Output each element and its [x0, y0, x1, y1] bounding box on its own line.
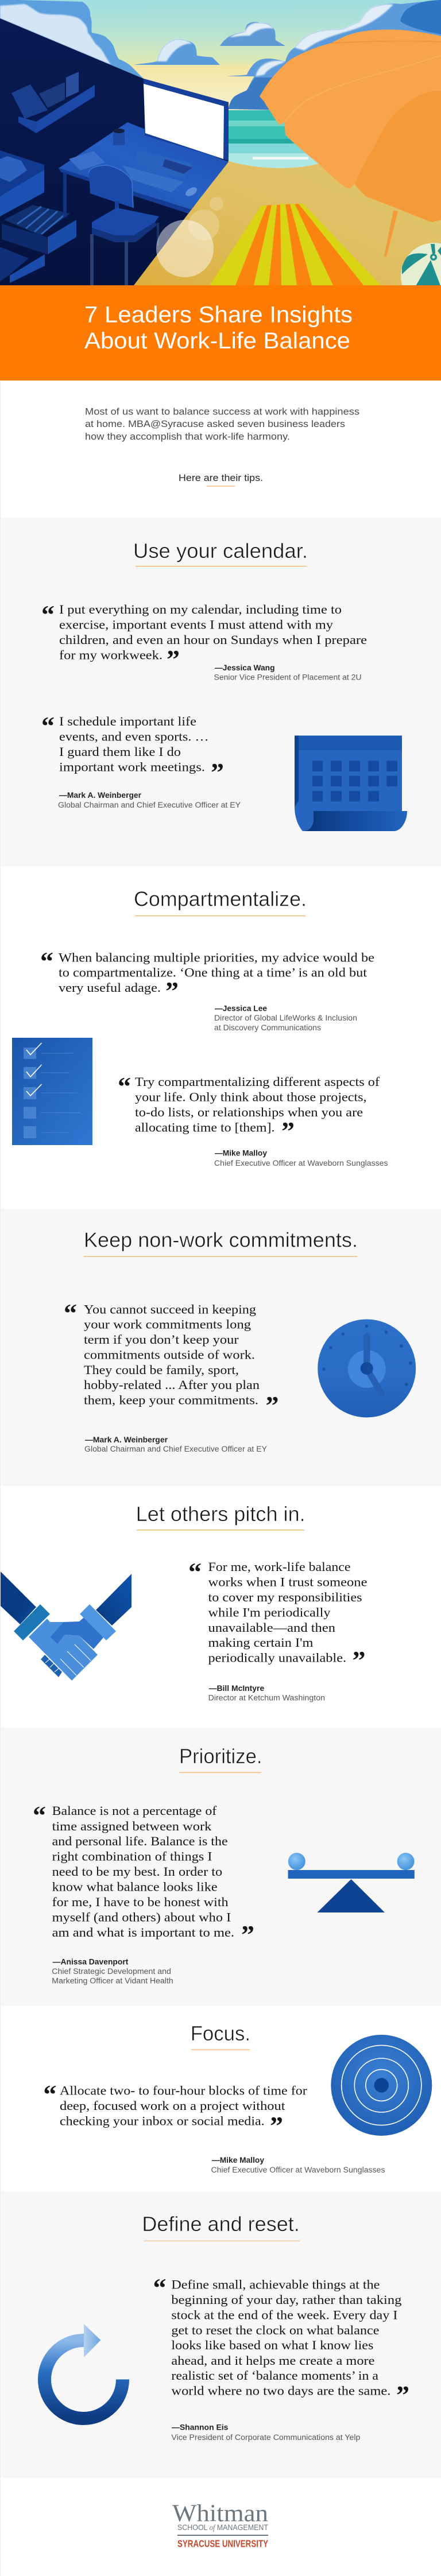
quote: Jessica Wang	[41, 600, 367, 682]
quote: Bill McIntyre: while I'm periodically	[208, 1605, 331, 1619]
heading: prioritize: Prioritize.	[179, 1744, 262, 1768]
quote: Mark A. Weinberger: I guard them like I do	[59, 744, 181, 759]
intro text	[85, 406, 359, 442]
shelf with books	[11, 72, 95, 133]
quote: Shannon Eis: stock at the end of the week. Every day I	[171, 2307, 397, 2322]
quote: Mark A. Weinberger: “	[41, 711, 55, 740]
office wall	[0, 18, 229, 285]
quote: Mike Malloy: Allocate two- to four-hour blocks of time for	[60, 2084, 307, 2097]
quote: Shannon Eis: looks like based on what I know lies	[171, 2338, 373, 2352]
sand	[134, 161, 441, 285]
quote: Anissa Davenport: ”	[241, 1920, 254, 1949]
panel: let others pitch in	[1, 1486, 441, 1728]
quote: Jessica Lee: ”	[165, 976, 179, 1006]
quote: Jessica Lee: —Jessica Lee	[215, 1004, 268, 1012]
quote: Mike Malloy: Try compartmentalizing different aspects of	[135, 1074, 380, 1089]
heading: focus: Focus.	[191, 2022, 250, 2045]
quote: Mark A. Weinberger: events, and even sports. …	[59, 729, 209, 743]
quote: Mark A. Weinberger: I schedule important life	[59, 714, 196, 728]
quote: Mark A. Weinberger: your work commitments long	[84, 1317, 251, 1332]
quote: Shannon Eis: get to reset the clock on what balance	[171, 2323, 379, 2337]
quote: Mike Malloy: ”	[270, 2111, 283, 2140]
quote: Mike Malloy: to-do lists, or relationships when you are	[135, 1105, 363, 1119]
logo: Whitman School of Management, Syracuse University: SYRACUSE UNIVERSITY	[177, 2538, 268, 2550]
quote: Shannon Eis: “	[153, 2273, 167, 2302]
panel: keep non-work commitments	[1, 1209, 441, 1486]
umbrella	[260, 29, 441, 257]
quote: Shannon Eis: —Shannon Eis	[172, 2423, 228, 2431]
quote: Mark A. Weinberger: ”	[211, 758, 224, 787]
quote: Jessica Lee: very useful adage.	[59, 980, 161, 995]
quote: Jessica Wang: children, and even an hour on Sundays when I prepare	[59, 633, 367, 647]
heading: define and reset: Define and reset.	[142, 2212, 300, 2236]
quote: Mark A. Weinberger: They could be family, sport,	[84, 1363, 239, 1377]
quote: Jessica Wang: “	[41, 600, 55, 629]
quote: Mike Malloy: your life. Only think about those projects,	[135, 1090, 367, 1104]
panel: define and reset	[1, 2191, 441, 2478]
intro text: Most of us want to balance success at work with happiness	[85, 406, 359, 417]
quote: Bill McIntyre: For me, work-life balance	[208, 1559, 350, 1574]
quote: Jessica Lee: at Discovery Communications	[214, 1023, 321, 1032]
quote: Bill McIntyre: unavailable—and then	[208, 1620, 335, 1635]
heading: use your calendar: Use your calendar.	[133, 539, 308, 562]
logo: Whitman School of Management, Syracuse University	[172, 2501, 268, 2550]
icon: handshake	[1, 1572, 131, 1681]
quote: Anissa Davenport: need to be my best. In order to	[52, 1864, 222, 1879]
quote: Mike Malloy	[118, 1072, 388, 1167]
quote: Shannon Eis: ”	[396, 2380, 409, 2410]
quote: Anissa Davenport: —Anissa Davenport	[53, 1957, 129, 1966]
quote: Bill McIntyre: works when I trust someone	[208, 1575, 368, 1589]
quote: Mike Malloy: “	[118, 1072, 131, 1101]
quote: Jessica Lee: When balancing multiple priorities, my advice would be	[59, 950, 374, 964]
quote: Shannon Eis: beginning of your day, rather than taking	[171, 2292, 401, 2307]
icon: balance scale	[288, 1853, 415, 1912]
quote: Mark A. Weinberger: Global Chairman and Chief Executive Officer at EY	[58, 801, 241, 809]
quote: Bill McIntyre: ”	[353, 1646, 365, 1675]
quote: Mike Malloy: —Mike Malloy	[212, 2156, 264, 2164]
quote: Mark A. Weinberger: You cannot succeed in keeping	[84, 1302, 256, 1316]
quote: Jessica Wang: —Jessica Wang	[215, 664, 274, 672]
icon: reset arrow	[44, 2324, 123, 2418]
quote: Mark A. Weinberger	[41, 711, 241, 809]
desk with keyboard and mug	[59, 122, 229, 217]
icon: checklist	[12, 1038, 92, 1145]
quote: Jessica Wang: for my workweek.	[59, 648, 163, 662]
beach ball	[401, 243, 441, 285]
quote: Jessica Wang: Senior Vice President of Placement at 2U	[214, 673, 362, 682]
panel: use your calendar	[1, 518, 441, 867]
quote: Mark A. Weinberger: ”	[265, 1391, 279, 1420]
quote: Mike Malloy: checking your inbox or social media.	[60, 2114, 265, 2128]
quote: Anissa Davenport	[33, 1801, 254, 1985]
heading: keep non-work commitments: Keep non-work commitments.	[84, 1228, 358, 1251]
quote: Mike Malloy: Chief Executive Officer at Waveborn Sunglasses	[214, 1159, 388, 1167]
quote: Shannon Eis: Vice President of Corporate Communications at Yelp	[171, 2433, 360, 2442]
quote: Anissa Davenport: “	[33, 1801, 46, 1830]
quote: Shannon Eis: Define small, achievable things at the	[171, 2277, 380, 2291]
icon: clock	[318, 1319, 416, 1418]
quote: Shannon Eis: ahead, and it helps me create a more	[171, 2353, 374, 2368]
quote: Mike Malloy: Chief Executive Officer at Waveborn Sunglasses	[211, 2166, 385, 2174]
intro text: at home. MBA@Syracuse asked seven business leaders	[85, 418, 345, 429]
panel: compartmentalize	[1, 867, 441, 1209]
quote: Jessica Wang: ”	[167, 645, 180, 674]
chair	[89, 165, 159, 285]
monitor	[144, 79, 229, 161]
quote: Bill McIntyre: to cover my responsibilities	[208, 1590, 362, 1604]
hero illustration: office and beach	[0, 0, 441, 309]
bokeh lights	[156, 197, 223, 277]
quote: Jessica Lee: “	[40, 946, 53, 976]
quote: Bill McIntyre: periodically unavailable.	[208, 1651, 346, 1665]
quote: Mike Malloy: “	[43, 2080, 56, 2109]
quote: Mike Malloy: ”	[281, 1116, 295, 1146]
panel: prioritize	[1, 1728, 441, 2006]
quote: Anissa Davenport: know what balance looks like	[52, 1879, 218, 1894]
quote: Bill McIntyre	[188, 1557, 368, 1702]
quote: Mike Malloy: deep, focused work on a project without	[60, 2098, 285, 2113]
clouds	[0, 0, 441, 110]
quote: Mark A. Weinberger: —Mark A. Weinberger	[59, 791, 142, 800]
quote: Anissa Davenport: Chief Strategic Development and	[52, 1967, 171, 1976]
quote: Bill McIntyre: Director at Ketchum Washington	[208, 1694, 325, 1702]
title banner	[0, 285, 441, 381]
heading: compartmentalize: Compartmentalize.	[134, 887, 307, 910]
quote: Mark A. Weinberger: —Mark A. Weinberger	[85, 1436, 168, 1444]
quote: Mark A. Weinberger: hobby-related ... After you plan	[84, 1378, 260, 1392]
logo: Whitman School of Management, Syracuse University: SCHOOL of MANAGEMENT	[177, 2523, 268, 2532]
filing cabinet	[0, 150, 76, 283]
sea	[228, 110, 322, 168]
quote: Anissa Davenport: for me, I have to be honest with	[52, 1895, 229, 1909]
quote: Anissa Davenport: time assigned between work	[52, 1819, 212, 1833]
quote: Mark A. Weinberger	[64, 1298, 279, 1453]
quote: Mike Malloy: allocating time to [them].	[135, 1120, 274, 1134]
quote: Anissa Davenport: and personal life. Balance is the	[52, 1834, 228, 1848]
quote: Anissa Davenport: am and what is important to me.	[52, 1925, 234, 1939]
quote: Mark A. Weinberger: “	[64, 1298, 77, 1328]
quote: Anissa Davenport: Balance is not a percentage of	[52, 1803, 217, 1818]
quote: Jessica Lee: to compartmentalize. ‘One thing at a time’ is an old but	[59, 965, 368, 980]
quote: Mike Malloy: —Mike Malloy	[215, 1149, 267, 1158]
quote: Mark A. Weinberger: them, keep your commitments.	[84, 1393, 258, 1407]
quote: Shannon Eis: world where no two days are the same.	[171, 2383, 390, 2398]
quote: Mark A. Weinberger: commitments outside of work.	[84, 1348, 255, 1361]
quote: Jessica Wang: exercise, important events I must attend with my	[59, 618, 334, 632]
quote: Jessica Wang: I put everything on my calendar, including time to	[59, 602, 342, 616]
quote: Bill McIntyre: “	[188, 1557, 202, 1586]
heading: let others pitch in: Let others pitch in.	[136, 1502, 305, 1526]
icon: calendar	[295, 736, 407, 831]
quote: Anissa Davenport: right combination of things I	[52, 1849, 212, 1863]
quote: Mark A. Weinberger: important work meetings.	[59, 759, 205, 774]
quote: Bill McIntyre: making certain I'm	[208, 1635, 314, 1650]
quote: Jessica Lee	[40, 946, 374, 1032]
quote: Shannon Eis	[153, 2273, 409, 2442]
quote: Anissa Davenport: Marketing Officer at Vidant Health	[52, 1977, 173, 1985]
quote: Shannon Eis: realistic set of ‘balance moments’ in a	[171, 2368, 378, 2383]
title: About Work-Life Balance	[84, 328, 350, 354]
title	[84, 302, 353, 354]
title: 7 Leaders Share Insights	[84, 302, 353, 327]
beach towel stripes	[210, 204, 381, 285]
quote: Mark A. Weinberger: Global Chairman and Chief Executive Officer at EY	[84, 1445, 267, 1453]
logo: Whitman School of Management, Syracuse University: Whitman	[172, 2501, 268, 2527]
icon: target	[331, 2035, 432, 2136]
here are their tips: Here are their tips.	[179, 472, 263, 483]
panel: focus	[1, 2006, 441, 2191]
quote: Bill McIntyre: —Bill McIntyre	[209, 1684, 265, 1693]
quote: Mike Malloy	[43, 2080, 385, 2174]
quote: Jessica Lee: Director of Global LifeWorks & Inclusion	[214, 1014, 357, 1022]
intro text: how they accomplish that work-life harmony.	[85, 431, 290, 442]
quote: Anissa Davenport: myself (and others) about who I	[52, 1910, 231, 1924]
quote: Mark A. Weinberger: term if you don’t keep your	[84, 1332, 239, 1347]
